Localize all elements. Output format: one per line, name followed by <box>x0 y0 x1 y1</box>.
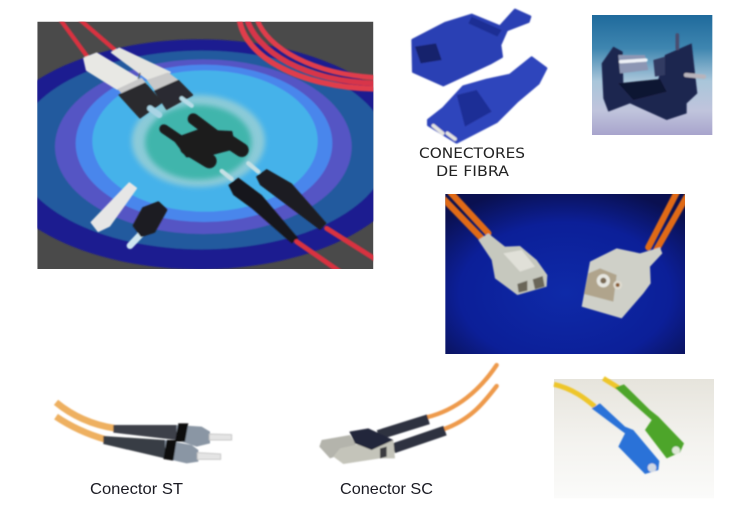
white boot and small black part <box>92 183 136 231</box>
central ST adapter <box>164 119 242 161</box>
black bands <box>163 423 188 461</box>
mount base <box>602 43 697 120</box>
SC connector pair: boots, bands, bodies, ferrules <box>112 48 170 79</box>
knob and rod <box>653 57 665 77</box>
blue receptacle <box>413 10 530 85</box>
dark barrels <box>378 419 428 435</box>
blue connector <box>592 403 659 474</box>
orange fibers <box>427 365 497 429</box>
lower ST plug <box>103 436 165 458</box>
white socket <box>582 247 662 318</box>
caption: conectores de fibra <box>419 146 525 180</box>
yellow fibers <box>554 378 618 407</box>
photo: fiber connectors on blue glow <box>37 22 374 269</box>
photo: precision alignment mount <box>592 15 712 135</box>
photo: SC connector pair <box>319 365 497 464</box>
grey housings <box>319 435 358 458</box>
caption: conector ST: Conector ST <box>90 481 183 498</box>
white plug <box>478 233 547 295</box>
orange fibers <box>56 402 115 439</box>
silver barrel <box>618 55 648 73</box>
upper ST plug <box>113 425 177 440</box>
top-left red cables <box>59 18 115 57</box>
ST plugs lower right <box>222 163 258 179</box>
photo: blue and green SC connectors <box>554 378 714 498</box>
photo: blue fiber connectors <box>413 10 546 142</box>
photo: ST connector pair <box>56 402 232 463</box>
green connector <box>615 384 684 458</box>
blue plug <box>428 58 546 142</box>
caption: conectores de fibra: CONECTORES <box>419 146 525 162</box>
black clips <box>349 428 393 450</box>
caption: conector SC: Conector SC <box>340 481 433 498</box>
photo: white duplex connectors on blue <box>444 191 687 354</box>
top-right red cable coil <box>239 18 377 89</box>
caption: conectores de fibra: DE FIBRA <box>436 164 509 180</box>
orange cables <box>444 191 687 249</box>
